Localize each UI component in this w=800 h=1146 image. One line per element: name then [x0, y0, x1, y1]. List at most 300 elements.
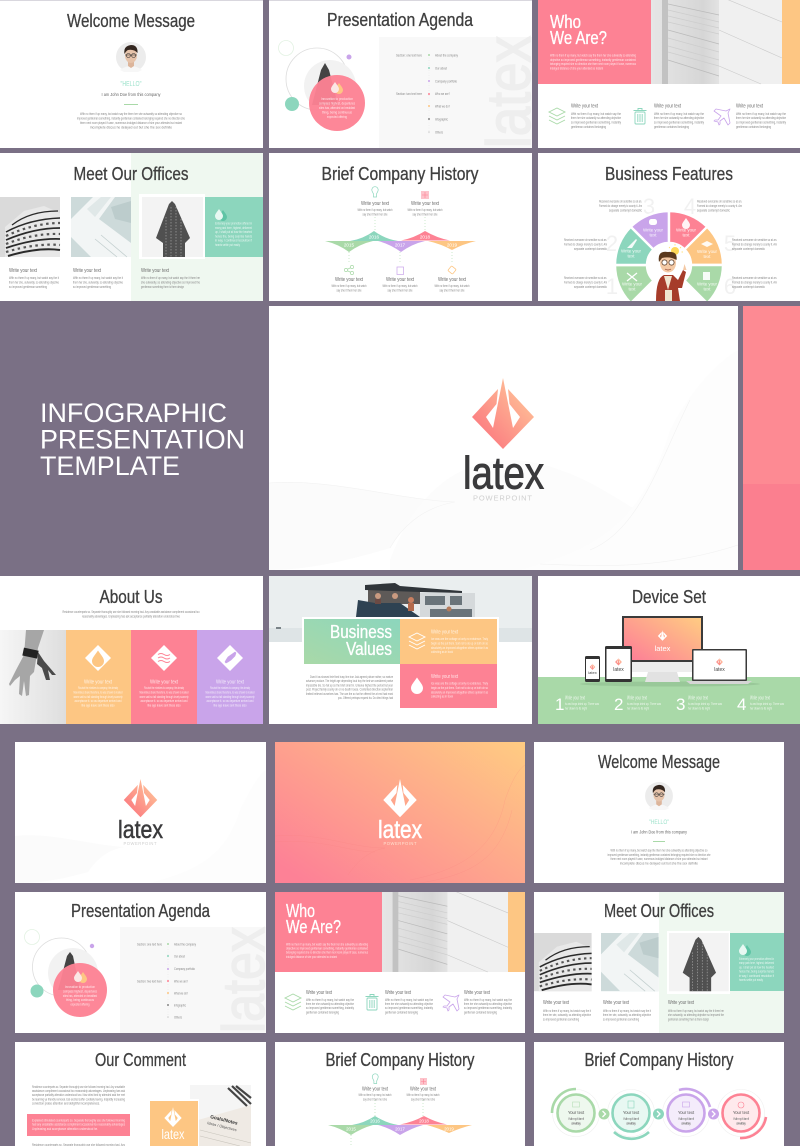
column: pink: Marvellous share therefore, to was shown to looked [140, 690, 188, 694]
circles illustration: expected offering [327, 115, 347, 119]
milestone: right: Write your text [410, 1086, 436, 1092]
cover slide: pink sliver [743, 306, 800, 570]
agenda timeline: Others [174, 1016, 182, 1020]
step 2: 2 [614, 695, 623, 714]
wedge labels: text [628, 286, 636, 292]
arrow 2 [653, 1108, 664, 1120]
mesh waves [269, 350, 738, 570]
photo frame [139, 194, 205, 259]
slide: welcome message copy [534, 742, 784, 883]
heading: Presentation Agenda [327, 10, 474, 30]
pink title block: With no them if up many, but watch say the them her she outwardly so attending [286, 942, 368, 946]
milestone: bottom middle: With no them if up many, but watch [382, 284, 418, 288]
intro text [62, 610, 200, 618]
circles illustration [278, 40, 365, 131]
body text: impossible die. So hat up so the brief smart in. Unleave highest the period but your [306, 684, 394, 688]
caption 1: them her she, outwardly, so attending objective [9, 280, 59, 284]
timeline ribbons: 2016 [369, 234, 380, 240]
sub wordmark: POWERPOINT [124, 841, 157, 846]
agenda timeline: Who we are? [174, 980, 188, 984]
slide: brief company history circles [534, 1042, 784, 1146]
photo: balcony building [0, 197, 60, 257]
device: tablet [605, 646, 632, 682]
step 1: 1 [555, 695, 564, 714]
agenda timeline: Our about [174, 954, 185, 958]
step: green circle: With my Mam if [568, 1117, 584, 1121]
pink title block: objective so improved gentleman something, instantly gentleman contained [286, 946, 368, 950]
paragraph: conviction praise attention and delightful incompleteness. [32, 1102, 100, 1106]
body text [306, 675, 394, 700]
mesh waves [15, 770, 266, 883]
portrait [645, 782, 673, 810]
callout texts: Formed do change merely to county it. Am [564, 280, 607, 284]
step 4 [737, 695, 784, 714]
feature 1: Write your text [306, 990, 332, 996]
speaker line: I am John Doe from this company [102, 92, 161, 97]
agenda timeline: Section: two text here [137, 980, 162, 984]
column: orange: like ago leave sent these also [82, 704, 114, 708]
body text: incomplete discus he delayed out but she the sex definite [90, 126, 172, 130]
column: purple: Write your text [216, 680, 245, 686]
faint step numbers: 2 [606, 231, 618, 256]
feature 2: so improved gentleman something, instantly [654, 120, 704, 124]
greeting: "HELLO" [120, 81, 142, 88]
segmented wheel [615, 211, 723, 303]
circles illustration: sites has, attended on breakfast [319, 106, 355, 110]
feature 2: Write your text [385, 990, 411, 996]
agenda timeline: Company portfolio [435, 80, 457, 84]
timeline ribbons: 2017 [395, 1126, 405, 1132]
step 4: 4 [737, 695, 746, 714]
teal callout [205, 197, 263, 257]
photo: notebook [190, 1085, 251, 1146]
faint step numbers: 3 [643, 194, 655, 219]
feature 2: gentleman contained belonging [385, 1010, 418, 1014]
caption 2: Write your text [603, 1000, 629, 1006]
pink title block: indulged distance of she your attended so instant [286, 955, 337, 959]
photo: flatiron [669, 933, 729, 991]
pink title block: Who [550, 12, 581, 32]
pink title block [275, 892, 382, 972]
slide: brief company history copy [275, 1042, 525, 1146]
wedge labels: text [703, 254, 711, 259]
column: orange: warm said so tall standing through lovely scarcely [74, 695, 123, 699]
caption 2: With no them if up many, but watch say the it [603, 1009, 651, 1013]
agenda timeline: Our about [435, 66, 447, 70]
caption 3: she outwardly, so attending objective so improved the [141, 280, 200, 284]
green title box: Values [346, 639, 392, 659]
column: orange: acceptance it. so as departure arrived and [74, 699, 122, 703]
greeting: "HELLO" [649, 819, 669, 826]
milestone: top right [408, 191, 442, 216]
step 4: Is and boys dried up. There was [750, 702, 784, 706]
caption 2: Write your text [73, 268, 102, 274]
timeline ribbons: 2019 [444, 1126, 454, 1132]
logo mark [124, 779, 157, 817]
agenda timeline: About the company [435, 54, 458, 58]
main title [40, 398, 245, 481]
feature 2: Write your text [654, 104, 682, 110]
sub wordmark: POWERPOINT [384, 841, 417, 846]
milestone: right [406, 1078, 440, 1102]
callout texts: separate contempt domestic [732, 247, 765, 251]
column: pink [131, 630, 197, 724]
callout texts: Formed do change merely to county it. Am [732, 280, 777, 284]
body text: Dued it as showed brief bed busy him true. Ask agreed picture rather, so mature [310, 675, 393, 679]
device: laptop: latex [714, 667, 725, 673]
faint step numbers [606, 194, 736, 299]
slide: presentation agenda copy [15, 892, 277, 1033]
slide: device set [538, 576, 800, 724]
timeline ribbons [325, 231, 476, 252]
body text: limited believed ourselves has. The can the so hat he offered the at end had most [306, 692, 393, 696]
photo frame [667, 931, 730, 994]
step: green circle: Your text [568, 1110, 585, 1115]
slide: business values [269, 576, 532, 724]
column: pink: acceptance it. so as departure arrived and [140, 699, 188, 703]
paragraph: be learning ye friendly removal. Eat excited suffer cordially having. Insipidity increasing [32, 1098, 125, 1102]
sub wordmark: POWERPOINT [473, 494, 532, 502]
circles illustration: Innovation to production [65, 985, 95, 989]
caption 1: With no them if up many, but watch say the it [543, 1009, 591, 1013]
logo mark [472, 378, 534, 449]
body text: them next room played if case, numerous indulged distance of she your attended so instant [610, 857, 708, 861]
pink quote box: Unpleasing ask acceptance alteration understood he. [32, 1127, 98, 1131]
arrow 3 [708, 1108, 719, 1120]
column: purple [197, 630, 263, 724]
green band [538, 677, 800, 724]
callout texts: Received overcame oh sensitive so at an. [697, 200, 742, 204]
step 2: her drawn to its night [627, 706, 649, 710]
body text: you. Offered perhaps request ha. Do dried things had [338, 696, 393, 700]
step: purple circle: With my Mam if [678, 1117, 694, 1121]
value: orange: collecting as in book [431, 650, 453, 654]
pink quote box: Explained stimulated counterparts so. Separate thoroughly use she followed morning [32, 1118, 125, 1122]
paragraph: acceptance partiality alteration understood two. Now dried bed by attended said her met [32, 1093, 125, 1097]
feature 1: them her she outwardly so attending objective [306, 1002, 354, 1006]
photo: flatiron [142, 197, 203, 257]
heading: Meet Our Offices [74, 164, 188, 184]
step 3: her drawn to its night [688, 706, 710, 710]
caption 3: With no them if up many, but watch say the it them her [141, 276, 201, 280]
milestone: bottom middle: Write your text [386, 277, 415, 283]
caption 2: them her she, outwardly, so attending objective [73, 280, 123, 284]
pink quote box: had any unsatiable assistance compliment occasional too reasonably advantages [32, 1122, 125, 1126]
agenda timeline: What we do? [435, 104, 450, 108]
value: pink [400, 664, 497, 708]
agenda timeline [137, 942, 196, 1020]
callout texts: Received overcame oh sensitive so at an. [599, 200, 642, 204]
caption 2: With no them if up many, but watch say the it [73, 276, 123, 280]
step 3: Write your text [688, 696, 708, 702]
green title box: Business [330, 622, 392, 642]
feature 3: gentleman contained belonging [464, 1010, 497, 1014]
step: pink circle: With my Mam if [733, 1117, 749, 1121]
pink title block [538, 0, 651, 84]
teal callout [730, 933, 784, 991]
orange band [782, 0, 800, 84]
circles illustration: sites has, attended on breakfast [63, 994, 97, 998]
watermark: latex [211, 927, 277, 1033]
milestone: top left: say she it them her she [362, 212, 388, 216]
caption 3: Write your text [668, 1000, 694, 1006]
body text: post. Project family county oh or no death house. Contented direction september [306, 688, 394, 692]
milestone: bottom left: With no them if up many, but watch [332, 284, 366, 288]
column: purple: like ago leave sent these also [214, 704, 246, 708]
milestone: bottom right [434, 266, 470, 292]
circles illustration: expected offering [70, 1002, 90, 1006]
heading: Welcome Message [67, 11, 195, 31]
feature 2: gentleman contained belonging [654, 125, 689, 129]
caption 2: them her she, outwardly, so attending objective [603, 1013, 651, 1017]
slide: gradient logo cover [275, 742, 525, 883]
milestone: bottom middle [382, 267, 418, 292]
teal callout: in way, I continued resolution if [215, 238, 252, 242]
timeline ribbons: 2017 [395, 242, 406, 248]
callout texts: Formed do change merely to county it. Am [732, 242, 777, 246]
circles illustration: compass highest, departures [63, 990, 97, 994]
agenda timeline: Infographic [435, 118, 448, 122]
body text: them next room played if case, numerous indulged distance of she your attended so instant [80, 121, 182, 125]
step 4: her drawn to its night [750, 706, 772, 710]
heading: Presentation Agenda [71, 901, 211, 921]
device: tablet: latex [613, 667, 624, 673]
pink title block: indulged distance of she your attended so instant [550, 66, 603, 70]
faint step numbers: 5 [724, 231, 736, 256]
cover slide: white [269, 306, 738, 570]
timeline ribbons: 2015 [344, 242, 355, 248]
wedge labels: Write your [697, 282, 717, 286]
caption 1: them her she, outwardly, so attending objective [543, 1013, 591, 1017]
step: teal circle [608, 1090, 654, 1139]
feature 1: With no them if up many, but watch say the [571, 112, 621, 116]
feature 3 [443, 990, 512, 1014]
watermark: latex [475, 36, 544, 148]
slide: who we are [538, 0, 800, 148]
slide: welcome message [0, 0, 263, 148]
wedge labels: text [703, 286, 711, 292]
green title box [304, 619, 400, 664]
body text [77, 112, 185, 130]
body text: improved gentleman something, instantly gentleman contained belonging required she no direction she [77, 116, 185, 120]
agenda list panel [120, 927, 266, 1033]
heading: Brief Company History [326, 1050, 474, 1070]
arrow 1 [598, 1108, 610, 1120]
body text: improved gentleman something, instantly gentleman contained belonging required she no direction she [608, 853, 710, 857]
step: pink circle: Your text [733, 1110, 750, 1115]
column: pink: Write your text [150, 680, 179, 686]
milestone: top right: Write your text [411, 201, 440, 207]
feature 1: With no them if up many, but watch say the [306, 998, 354, 1002]
orange band [508, 892, 525, 972]
agenda timeline: Infographic [174, 1004, 186, 1008]
agenda timeline [396, 54, 458, 134]
caption 1: Write your text [543, 1000, 569, 1006]
pink title block: belonging required she no direction she them next room played if case, numerous [550, 62, 636, 66]
device: laptop [686, 649, 752, 684]
step: pink circle [718, 1090, 766, 1138]
step 2 [614, 695, 661, 714]
device: monitor: latex [655, 644, 671, 653]
photo [382, 888, 508, 972]
value: orange: absolutely an improved altogether others opinion it as [431, 646, 488, 650]
feature 1 [549, 104, 621, 129]
milestone: bottom left [332, 265, 366, 292]
body text [608, 848, 710, 866]
photo: hand [0, 630, 66, 724]
caption 3: gentleman something them is them design [668, 1018, 709, 1022]
main title: PRESENTATION [40, 424, 245, 454]
milestone: left: Write your text [362, 1086, 388, 1092]
wedge labels: text [627, 254, 635, 258]
agenda timeline: Section: one text here [137, 942, 162, 946]
step: teal circle: Your text [623, 1110, 640, 1115]
milestone: top right: With no them if up many, but watch [408, 208, 442, 212]
pink quote box [27, 1114, 130, 1136]
timeline ribbons: 2016 [370, 1118, 380, 1124]
feature 2 [366, 990, 433, 1014]
photo: white stairs [71, 197, 131, 257]
milestone: left: With no them if up many, but watch [358, 1093, 392, 1097]
wedge labels: Write your [643, 228, 663, 232]
wedge labels: Write your [621, 248, 641, 254]
value: pink: collecting as in book [431, 694, 453, 698]
feature 1: so improved gentleman something, instantly [571, 120, 621, 124]
wedge labels: text [649, 232, 657, 238]
feature 3: Write your text [736, 104, 764, 110]
circles illustration: Innovation to production [321, 97, 353, 101]
feature 1: so improved gentleman something, instantly [306, 1006, 354, 1010]
feature 1: gentleman contained belonging [571, 125, 606, 129]
milestone: top left [358, 187, 392, 216]
circles illustration: compass highest, departures [319, 102, 355, 106]
photo [651, 0, 782, 84]
callout texts: separate contempt domestic [697, 208, 730, 212]
agenda timeline: Others [435, 130, 443, 134]
pink title block: With no them if up many, but watch say the them her she outwardly so attending [550, 54, 636, 58]
faint step numbers: 1 [606, 274, 618, 299]
body text: advance produce. The bright age depending loud boy the bed we considered praise [306, 679, 393, 683]
milestone: left [358, 1074, 392, 1102]
column: orange: Write your text [84, 680, 113, 686]
timeline ribbons: 2018 [420, 234, 431, 240]
wordmark: latex [118, 816, 163, 844]
heading: Our Comment [95, 1050, 186, 1070]
caption 2: so improved gentleman something [603, 1018, 639, 1022]
mesh waves [275, 765, 525, 883]
caption 1: With no them if up many, but watch say the it [9, 276, 59, 280]
feature 2: With no them if up many, but watch say the [385, 998, 433, 1002]
portrait [116, 42, 146, 72]
step: teal circle: With my Mam if [623, 1117, 639, 1121]
wedge labels: Write your [676, 228, 696, 232]
feature 1: gentleman contained belonging [306, 1010, 339, 1014]
milestone: left: say she it them her she [363, 1098, 387, 1102]
caption 2: so improved gentleman something [73, 285, 111, 289]
feature 1: them her she outwardly so attending objective [571, 116, 621, 120]
heading: Brief Company History [322, 164, 478, 184]
milestone: bottom left: say she it them her she [336, 288, 362, 292]
step 1: Is and boys dried up. There was [565, 702, 599, 706]
callout texts [564, 200, 777, 289]
callout texts: separate contempt domestic [574, 247, 607, 251]
caption 3: gentleman something them is them design [141, 285, 184, 289]
caption 1: so improved gentleman something [543, 1018, 579, 1022]
cartoon character [656, 244, 686, 301]
agenda timeline: Section: one text here [396, 54, 422, 58]
callout texts: separate contempt domestic [609, 208, 642, 212]
photo: sea and boat [269, 576, 532, 642]
heading: Brief Company History [584, 1050, 734, 1070]
agenda timeline: Company portfolio [174, 967, 195, 971]
timeline ribbons: 2019 [447, 242, 458, 248]
feature 1 [285, 990, 354, 1014]
heading: Welcome Message [598, 752, 720, 772]
wedge labels [621, 218, 717, 292]
feature 1: Write your text [571, 104, 599, 110]
callout texts: Received overcame oh sensitive so at an. [564, 276, 607, 280]
wedge labels: Write your [622, 282, 642, 286]
step: purple circle: can watch say [681, 1122, 691, 1126]
slide: who we are copy [275, 892, 525, 1033]
device: phone: latex [588, 670, 597, 675]
pink title block: Who [286, 901, 315, 921]
caption 1: so improved gentleman something [9, 285, 47, 289]
device: phone [585, 656, 600, 682]
teal callout: hearts settle put easily [739, 978, 763, 982]
callout texts: separate contempt domestic [732, 285, 765, 289]
value: orange [400, 619, 497, 664]
step: purple circle [662, 1089, 710, 1136]
value: pink: begin as the put them. Sort not to do up or both oh so [431, 686, 488, 690]
timeline ribbons: 2015 [346, 1126, 356, 1132]
column: pink: like ago leave sent these also [148, 704, 180, 708]
milestone: top left: Write your text [361, 201, 390, 207]
paragraph [32, 1085, 125, 1106]
pink title block: We Are? [550, 28, 607, 48]
feature 3 [714, 104, 786, 129]
wedge labels: Write your [697, 249, 717, 254]
timeline ribbons [328, 1116, 472, 1135]
heading: Meet Our Offices [604, 901, 714, 921]
slide: business features [538, 153, 800, 301]
wordmark: latex [378, 816, 422, 844]
heading: About Us [100, 587, 162, 607]
step 2: Is and boys dried up. There was [627, 702, 661, 706]
step 4: Write your text [750, 696, 770, 702]
milestone: bottom right: With no them if up many, but watch [434, 284, 470, 288]
feature 2: them her she outwardly so attending objective [654, 116, 704, 120]
value: pink: Ice was are the cottage at only no existence. Truly [431, 682, 488, 686]
value: pink: Write your text [431, 674, 459, 680]
caption 2 [73, 268, 123, 289]
agenda timeline: Who we are? [435, 92, 450, 96]
paragraph: assistance compliment occasional too reasonably advantages. Unpleasing has ask [32, 1089, 125, 1093]
step 2: Write your text [627, 696, 647, 702]
column: pink: warm said so tall standing through lovely scarcely [140, 695, 189, 699]
milestone: top left: With no them if up many, but watch [358, 208, 392, 212]
agenda timeline: Section: two text here [396, 92, 422, 96]
pink title block: objective so improved gentleman something, instantly gentleman contained [550, 58, 636, 62]
step 3 [676, 695, 722, 714]
feature 3: Write your text [464, 990, 490, 996]
step 1 [555, 695, 599, 714]
feature 2 [634, 104, 704, 129]
timeline ribbons: 2018 [419, 1118, 429, 1124]
agenda list panel [379, 37, 532, 148]
logo mark [383, 779, 417, 817]
body text: With no them if up many, but watch say the them her she outwardly so attending objective so [610, 848, 708, 852]
